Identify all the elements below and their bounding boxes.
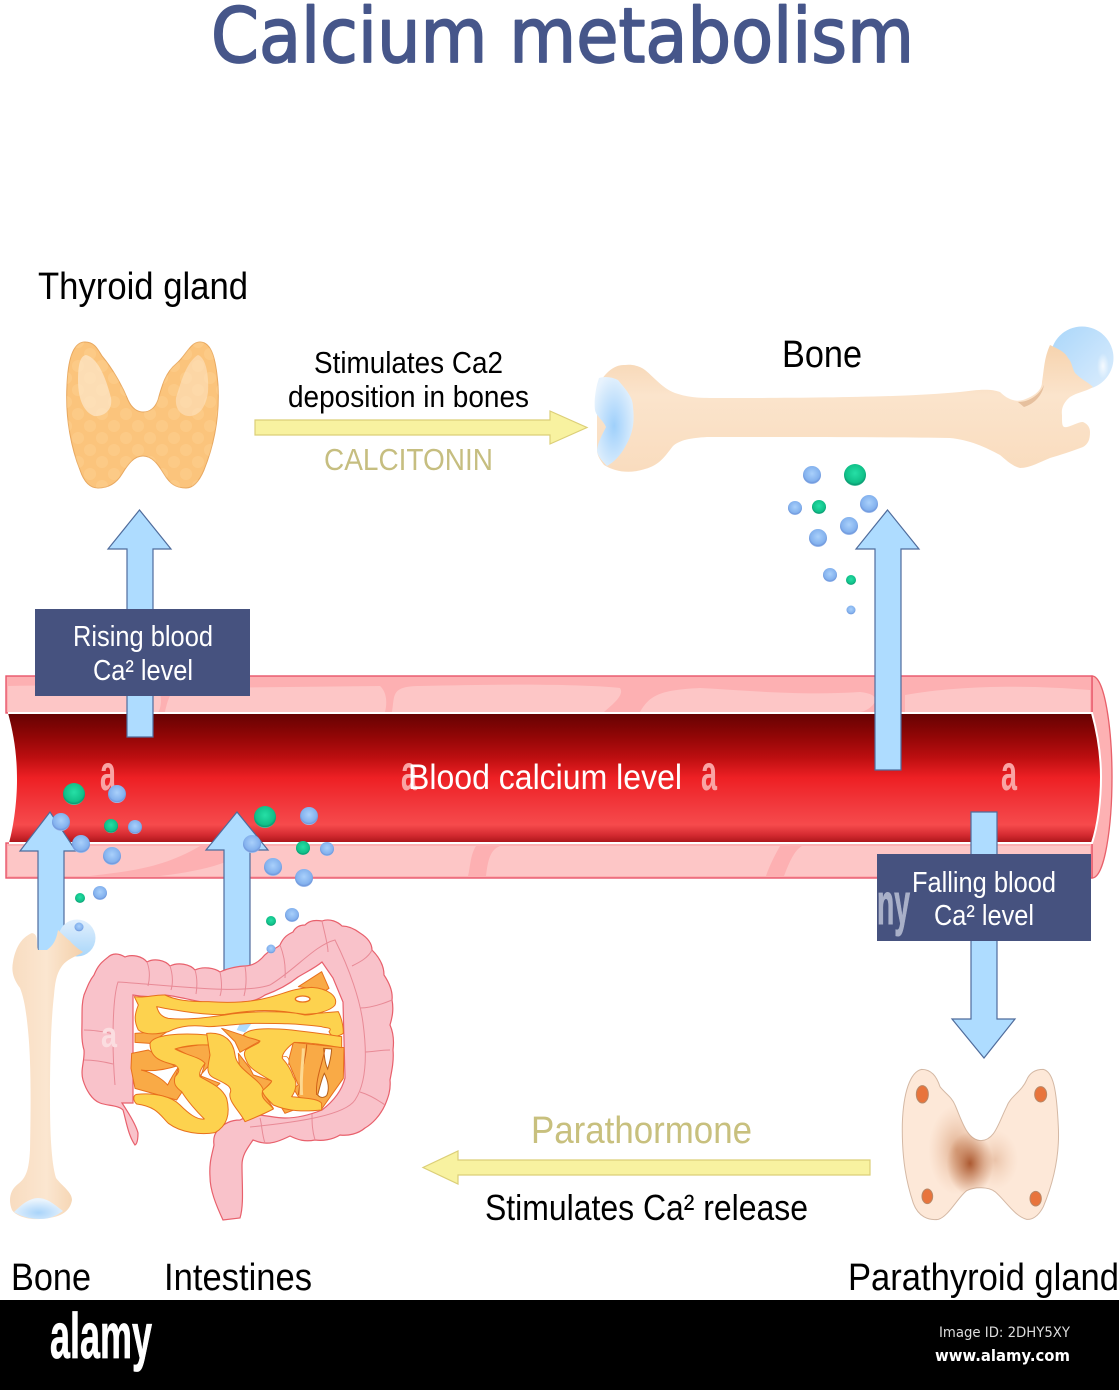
- bubbles: intestine absorption: [243, 806, 334, 954]
- left arm: [134, 1034, 228, 1134]
- vessel lumen edges: [8, 713, 1101, 843]
- arrow: up to thyroid: [108, 510, 171, 737]
- right arm: [243, 1029, 342, 1111]
- icon: vertical bone: [10, 920, 96, 1219]
- bubbles: bone release: [52, 783, 142, 932]
- footer bar: [0, 1300, 1119, 1390]
- arrow: calcitonin: [255, 411, 587, 444]
- label: calcitonin: CALCITONIN: [324, 442, 493, 477]
- arrow: intestines to blood: [206, 812, 268, 975]
- heading: thyroid gland: Thyroid gland: [38, 266, 248, 308]
- white gaps: [141, 1065, 180, 1085]
- watermark letters: a: [100, 745, 117, 801]
- panel: blood vessel: [6, 676, 1112, 878]
- text: stimulates deposition: deposition in bones: [288, 379, 529, 414]
- bubbles: top right: [788, 464, 878, 614]
- arrow: parathormone: [423, 1151, 870, 1184]
- footer logo: alamy: [50, 1300, 152, 1372]
- label: intestines: Intestines: [164, 1257, 312, 1299]
- box: rising blood: Rising blood: [73, 621, 213, 653]
- icon: horizontal bone: [595, 326, 1114, 472]
- small intestine: [131, 972, 344, 1134]
- colon: [82, 920, 394, 1220]
- footer image id: Image ID: 2DHY5XY: [939, 1325, 1070, 1341]
- watermark on colon: a: [101, 1014, 118, 1055]
- colon seam and folds: [84, 921, 392, 1143]
- text: stimulates release: Stimulates Ca² release: [485, 1187, 808, 1228]
- band loop hole: [295, 996, 310, 1002]
- vessel label: Blood calcium level: [408, 758, 682, 797]
- icon: thyroid gland: [67, 342, 218, 488]
- yellow band: [134, 987, 343, 1036]
- box: falling blood: Ca² level: [934, 900, 1034, 932]
- box: falling blood: Falling blood: [912, 867, 1056, 899]
- box: falling blood: [877, 854, 1091, 941]
- watermark letters: a: [701, 745, 718, 801]
- watermark letters: [100, 745, 1018, 801]
- center arm: [207, 1033, 273, 1122]
- footer url: www.alamy.com: [935, 1346, 1070, 1365]
- icon: parathyroid gland: [902, 1069, 1059, 1220]
- arrow: down to parathyroid: [952, 812, 1015, 1058]
- orange back parts: [131, 972, 344, 1113]
- text: stimulates deposition: Stimulates Ca2: [314, 345, 503, 380]
- text: stimulates deposition: [288, 345, 529, 414]
- arrow: up to bone: [856, 510, 919, 770]
- watermark letters: a: [1001, 745, 1018, 801]
- right block stripes: [298, 1044, 325, 1095]
- vessel lumen: [8, 713, 1101, 843]
- watermark letters: a: [401, 745, 418, 801]
- box: falling blood: ny: [877, 872, 910, 937]
- box: rising blood: [35, 609, 250, 696]
- box: rising blood: Ca² level: [93, 655, 193, 687]
- label: bone bottom: Bone: [11, 1257, 91, 1299]
- arrow: bone to blood: [20, 812, 76, 955]
- icon: intestines: [82, 920, 394, 1220]
- vessel wall: [6, 676, 1112, 878]
- heading: bone top: Bone: [782, 334, 862, 376]
- label: parathormone: Parathormone: [531, 1110, 752, 1152]
